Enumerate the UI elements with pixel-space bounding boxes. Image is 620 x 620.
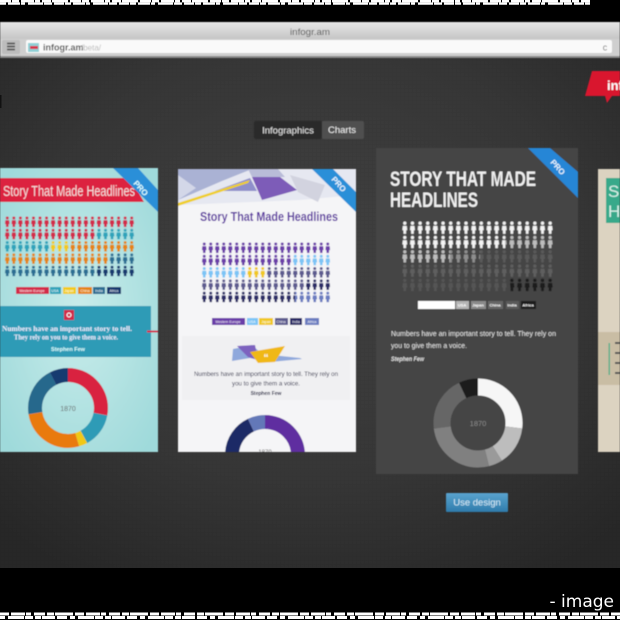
heading: Story That Made Headlines <box>200 209 338 224</box>
legend: China <box>80 289 90 293</box>
panel: beige template card (cropped) <box>598 169 620 452</box>
ribbon: PRO <box>113 168 158 212</box>
header polygons <box>178 169 356 206</box>
pictogram chart <box>4 216 135 278</box>
legend: China <box>276 320 286 324</box>
heading: STORY THAT MADE <box>390 168 536 191</box>
pictogram chart <box>401 221 554 293</box>
legend: Western Europe <box>19 289 45 293</box>
legend: USA <box>458 302 466 308</box>
button: use design <box>446 493 508 512</box>
tabs: infographics and charts <box>254 121 364 139</box>
green heading block: S <box>608 182 619 201</box>
legend: China <box>489 302 501 308</box>
heading: HEADLINES <box>390 189 478 212</box>
address bar: infogr.am <box>43 42 84 52</box>
browser title bar: infogr.am <box>290 27 330 38</box>
legend: India <box>507 302 517 308</box>
donut chart: 1870 <box>258 450 272 456</box>
browser title bar <box>0 22 620 39</box>
icon: quote polygons <box>232 345 302 364</box>
quote box: Numbers have an important story to tell. <box>2 325 132 333</box>
donut chart: 1870 <box>60 406 76 413</box>
legend: Japan <box>472 302 484 308</box>
donut chart <box>224 414 306 453</box>
browser chrome <box>0 22 620 58</box>
legend: Africa <box>110 289 119 293</box>
legend: India <box>292 320 300 324</box>
bottom caption residue strip <box>0 614 620 618</box>
heading banner <box>0 178 144 202</box>
quote band: Stephen Few <box>251 391 282 397</box>
panel: dark template card <box>376 148 578 474</box>
legend: USA <box>51 289 59 293</box>
top caption residue strip <box>0 1 590 4</box>
donut chart <box>442 387 514 459</box>
quote band <box>194 344 339 397</box>
icon: quote polygons: “ <box>264 353 268 364</box>
pictogram chart <box>201 242 331 304</box>
edge mark <box>0 95 2 108</box>
panel: white purple template card <box>178 168 356 488</box>
legend: India <box>95 289 103 293</box>
address bar <box>26 40 612 53</box>
quote text: Stephen Few <box>391 357 424 363</box>
heading banner: Story That Made Headlines <box>3 183 135 200</box>
quote band: you to give them a voice. <box>232 380 300 388</box>
legend <box>212 318 319 325</box>
legend <box>418 301 536 309</box>
tabs: infographics and charts: Charts <box>328 125 356 136</box>
legend: USA <box>248 320 256 324</box>
quote box: Stephen Few <box>51 347 86 353</box>
panel: teal template card <box>0 168 158 452</box>
quote text <box>391 329 556 363</box>
ribbon: PRO: PRO <box>329 175 348 194</box>
caption: image: - image <box>550 592 614 612</box>
address bar: c <box>603 42 608 52</box>
ribbon: PRO <box>528 148 578 198</box>
logo: infogr.am red speech flag <box>585 71 620 103</box>
ribbon: PRO <box>312 169 356 212</box>
donut chart: 1870 <box>470 419 486 428</box>
green heading block: H <box>608 202 620 221</box>
quote box: They rely on you to give them a voice. <box>14 334 118 342</box>
legend <box>16 287 121 294</box>
heading <box>390 168 536 212</box>
icon: reader stack button <box>2 40 20 54</box>
legend: Japan <box>64 289 74 293</box>
legend: Japan <box>261 320 271 324</box>
quote box <box>0 306 158 357</box>
ribbon: PRO: PRO <box>131 179 150 198</box>
button: use design: Use design <box>453 498 501 508</box>
tabs: infographics and charts: Infographics <box>262 126 314 136</box>
quote text: Numbers have an important story to tell. They rely on <box>391 329 556 338</box>
quote band: Numbers have an important story to tell. They rely on <box>194 371 338 378</box>
legend: Western Europe <box>215 320 241 324</box>
browser toolbar <box>0 39 620 58</box>
green heading block <box>606 178 620 223</box>
address bar: /beta/ <box>81 44 102 52</box>
legend: Africa <box>522 302 534 308</box>
donut chart <box>35 375 101 441</box>
ribbon: PRO: PRO <box>548 158 567 177</box>
legend: Africa <box>308 320 317 324</box>
quote band <box>598 332 620 385</box>
quote text: you to give them a voice. <box>391 341 467 350</box>
